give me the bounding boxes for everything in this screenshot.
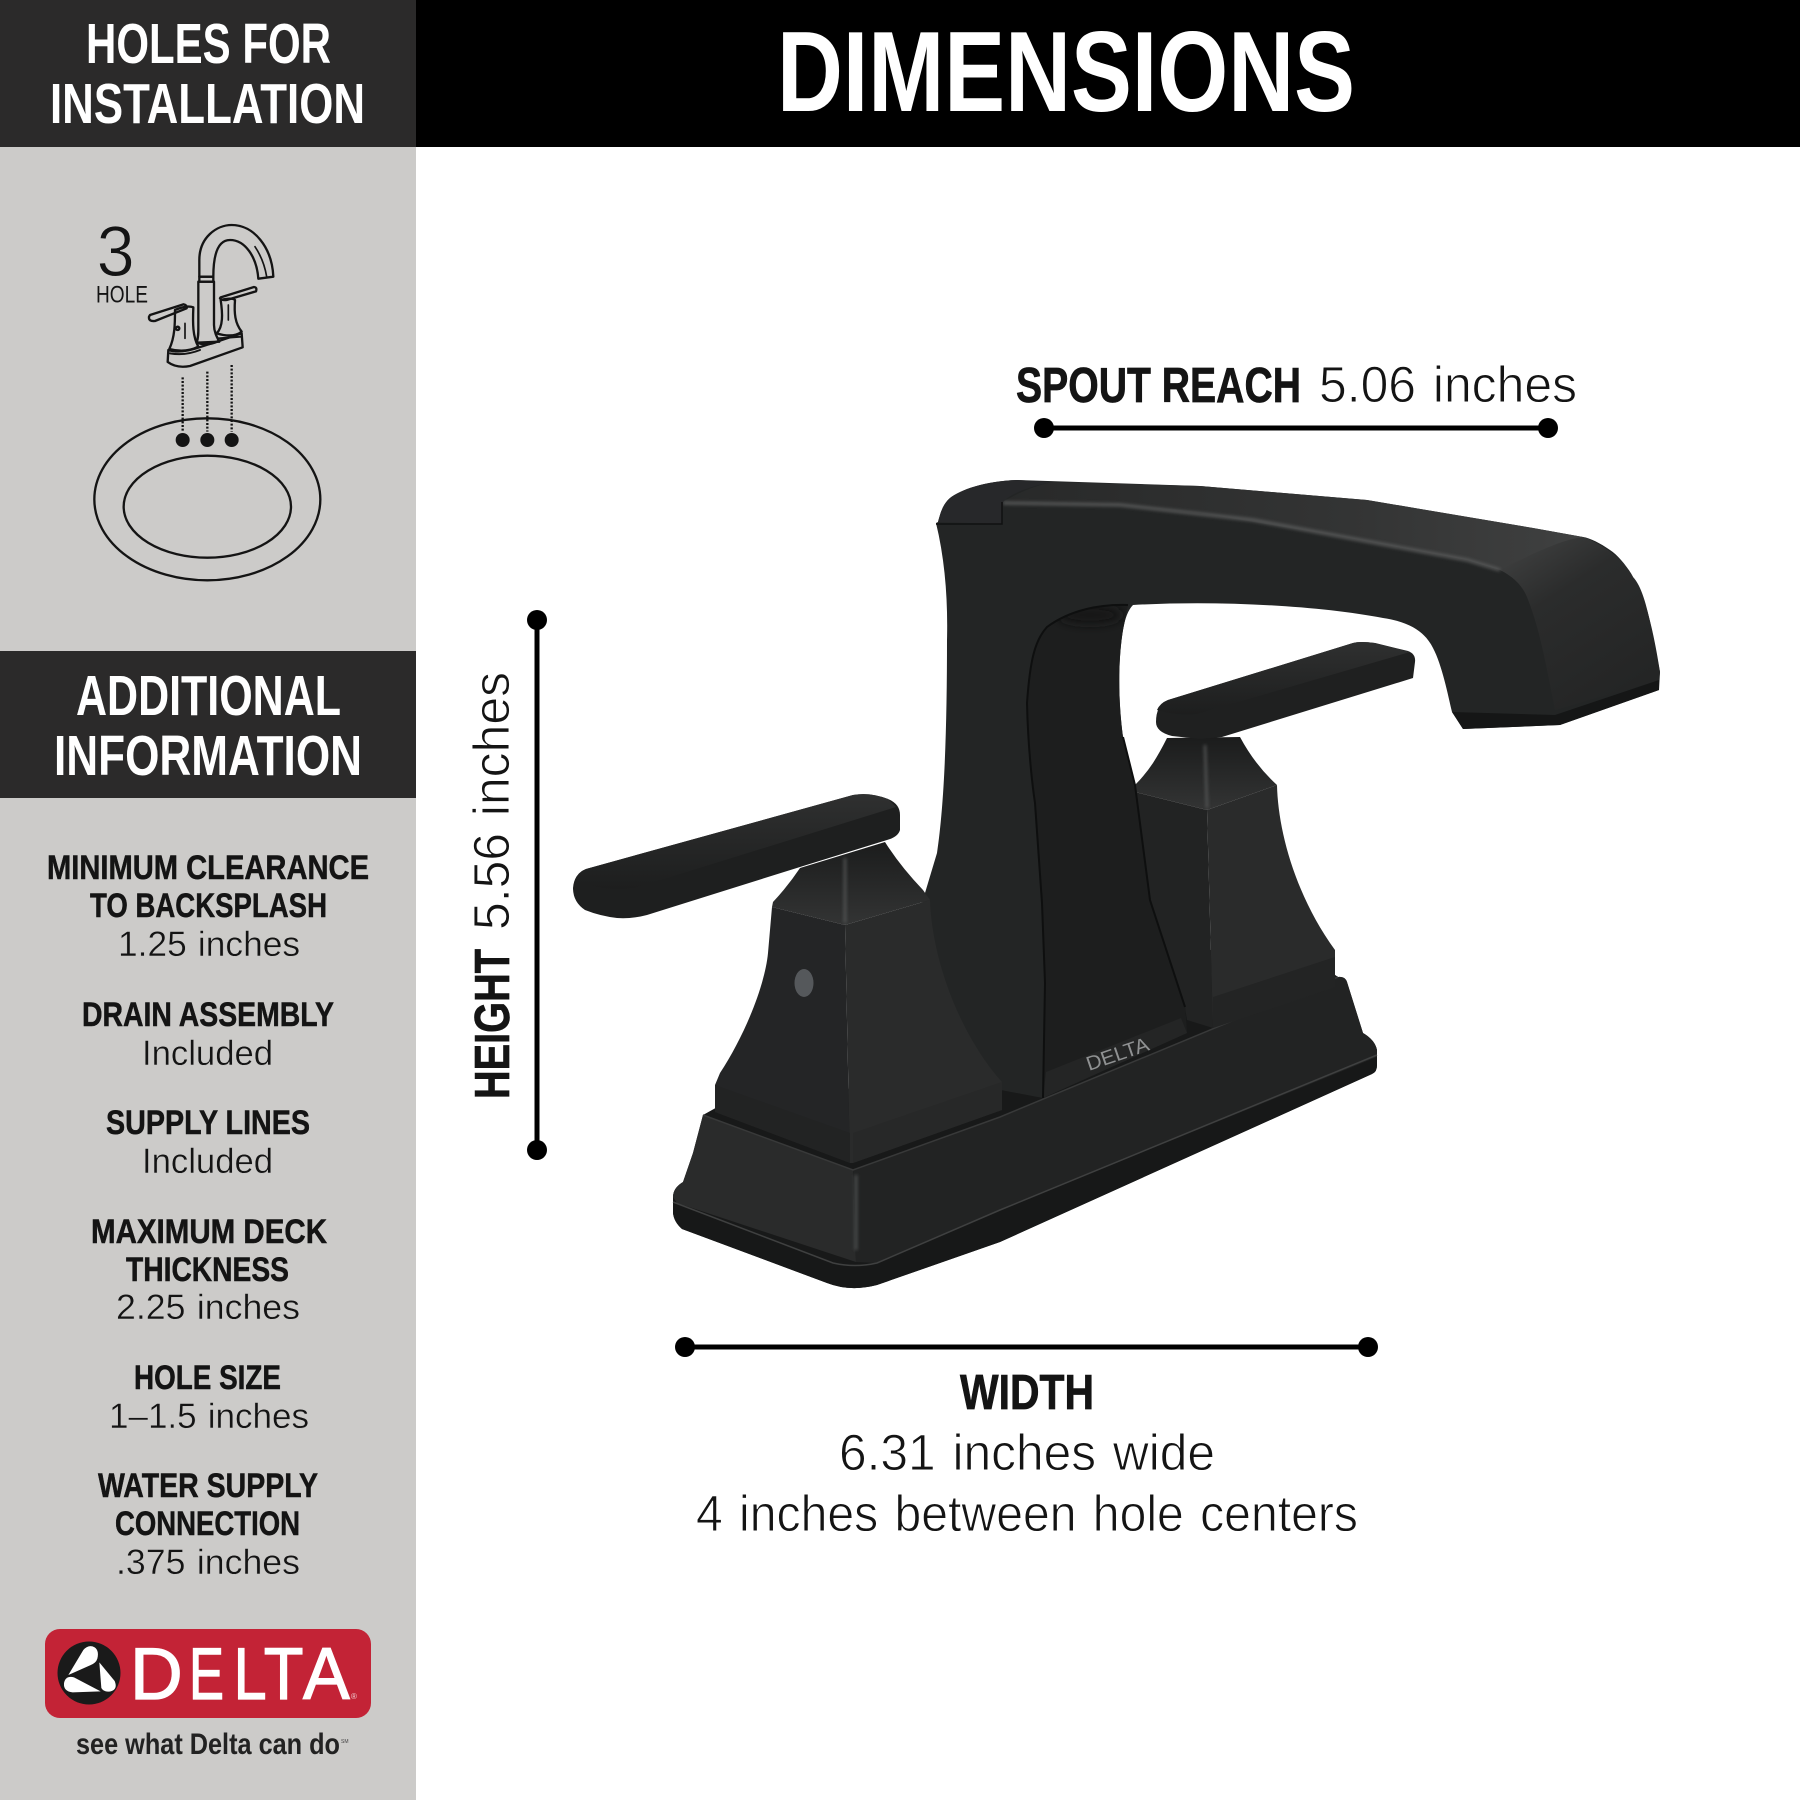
height label: 5.56 inches xyxy=(463,672,520,930)
right lever xyxy=(1156,642,1415,739)
text block: supply lines: SUPPLY LINES xyxy=(106,1104,310,1142)
faucet center panel xyxy=(1027,605,1187,1098)
text block: drain assembly: DRAIN ASSEMBLY xyxy=(82,996,334,1034)
arrow: width dimension line xyxy=(675,1337,1378,1357)
text block: minimum clearance: MINIMUM CLEARANCE xyxy=(47,849,369,887)
logo: delta: E xyxy=(189,1634,224,1715)
header: additional information: INFORMATION xyxy=(54,724,362,788)
text block: maximum deck thickness: 2.25 inches xyxy=(116,1288,300,1327)
icon: 3 hole faucet and sink diagram: HOLE xyxy=(96,281,148,308)
logo: delta xyxy=(45,1629,371,1718)
width label: 6.31 inches wide xyxy=(839,1424,1215,1481)
text block: hole size xyxy=(109,1359,309,1436)
text block: maximum deck thickness: THICKNESS xyxy=(126,1251,289,1289)
text block: maximum deck thickness: MAXIMUM DECK xyxy=(91,1213,327,1251)
icon: 3 hole faucet and sink diagram: 3 xyxy=(97,212,135,292)
text block: minimum clearance: 1.25 inches xyxy=(118,925,300,964)
header: additional information: ADDITIONAL xyxy=(76,664,341,728)
faucet base plate xyxy=(673,950,1377,1288)
height label: HEIGHT xyxy=(466,949,520,1099)
logo: delta: A xyxy=(303,1634,350,1715)
faucet brand mark: DELTA xyxy=(1083,1034,1153,1076)
text block: minimum clearance xyxy=(47,849,369,964)
right handle body xyxy=(1135,737,1335,1028)
text block: supply lines xyxy=(106,1104,310,1181)
faucet spout and body xyxy=(922,480,1660,1098)
text block: water supply connection xyxy=(98,1467,318,1582)
header: holes for installation: HOLES FOR xyxy=(86,12,331,76)
text block: supply lines: Included xyxy=(142,1142,273,1181)
header: holes for installation xyxy=(0,0,416,147)
panel: left sidebar xyxy=(0,0,416,1800)
tagline: SM xyxy=(341,1739,348,1745)
text block: hole size: HOLE SIZE xyxy=(134,1359,281,1397)
spout reach label xyxy=(1016,356,1577,413)
arrow: height dimension line xyxy=(527,610,547,1160)
logo: delta: ® xyxy=(351,1692,357,1701)
title: dimensions: DIMENSIONS xyxy=(777,9,1355,136)
text block: water supply connection: CONNECTION xyxy=(115,1505,300,1543)
title: dimensions xyxy=(416,0,1800,147)
logo: delta: D xyxy=(130,1634,183,1715)
header: holes for installation: INSTALLATION xyxy=(50,72,365,136)
height label xyxy=(463,672,520,1099)
text block: drain assembly: Included xyxy=(142,1034,273,1073)
width label: WIDTH xyxy=(960,1366,1094,1420)
text block: water supply connection: WATER SUPPLY xyxy=(98,1467,318,1505)
spout reach label: SPOUT REACH xyxy=(1016,359,1301,413)
header: additional information xyxy=(0,651,416,798)
logo: delta: L xyxy=(234,1634,267,1715)
arrow: spout reach dimension line xyxy=(1034,418,1558,438)
width label xyxy=(696,1366,1358,1542)
text block: hole size: 1–1.5 inches xyxy=(109,1397,309,1436)
width label: 4 inches between hole centers xyxy=(696,1485,1358,1542)
text block: drain assembly xyxy=(82,996,334,1073)
icon: 3 hole faucet and sink diagram xyxy=(94,212,320,580)
tagline: see what Delta can do xyxy=(76,1728,340,1761)
photo: matte black faucet xyxy=(573,480,1660,1288)
left lever xyxy=(573,794,900,918)
spout reach label: 5.06 inches xyxy=(1319,356,1577,413)
text block: water supply connection: .375 inches xyxy=(116,1543,300,1582)
left handle body xyxy=(715,842,1002,1163)
logo: delta: T xyxy=(264,1634,303,1715)
text block: minimum clearance: TO BACKSPLASH xyxy=(90,887,327,925)
text block: maximum deck thickness xyxy=(91,1213,327,1327)
